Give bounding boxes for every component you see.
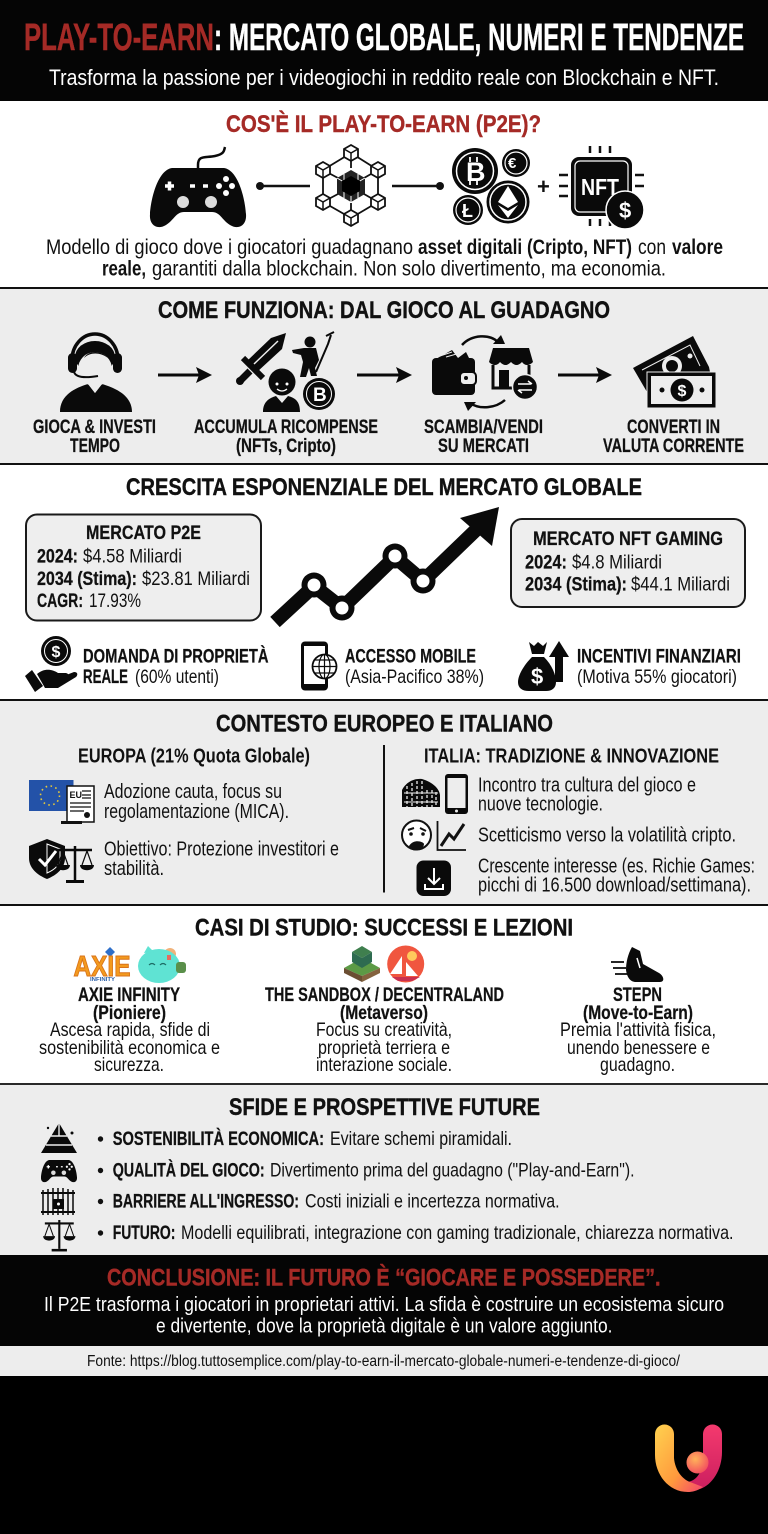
case: axie infinity: AXIE INFINITY [78,985,180,1006]
challenge: qualità [98,1160,635,1182]
conclusion text: e divertente, dove la proprietà digitale è un valore aggiunto. [156,1316,612,1338]
arrow [558,367,612,383]
challenge: barriere: BARRIERE ALL'INGRESSO: [113,1192,299,1212]
challenge: sostenibilità: SOSTENIBILITÀ ECONOMICA: [113,1128,324,1150]
case: stepn: guadagno. [600,1054,675,1076]
arrow [158,367,212,383]
icon: axie logo and mascot [74,946,186,983]
driver: incentivi finanziari: (Motiva 55% giocatori) [577,666,737,688]
heading: CRESCITA ESPONENZIALE DEL MERCATO GLOBALE [126,474,642,501]
plus sign: + [537,174,550,199]
title: PLAY-TO-EARN [24,17,214,59]
case: stepn [560,985,716,1076]
icon: NFT chip: NFT [581,174,619,200]
icon: rewards (sword, character, bitcoin): B [313,385,327,406]
challenge: barriere [98,1190,560,1212]
description: reale, [102,258,146,280]
case: axie infinity: Ascesa rapida, sfide di [50,1019,210,1041]
description: con [638,236,666,259]
stat box: mercato P2E: 2034 (Stima): [37,569,137,590]
step 3 label: SCAMBIA/VENDI [424,417,543,438]
icon: colosseum and phone [402,774,468,814]
stat box: mercato P2E: 2024: [37,546,78,568]
icon: money bag with up arrow: $ [531,664,543,689]
icon: coin over open hand: $ [52,644,60,661]
icon: thinking face and chart [402,820,466,850]
case: stepn: STEPN [613,985,662,1006]
case: axie infinity: sostenibilità economica e [39,1037,220,1059]
panel: cos'è il play-to-earn [0,101,768,287]
stat box: mercato P2E: CAGR: [37,591,83,612]
icon: pyramid [41,1123,77,1153]
case: axie infinity: (Pioniere) [93,1003,166,1024]
step 4 label: CONVERTI IN [627,417,720,438]
text: adozione cauta [104,781,289,823]
stat box: mercato NFT gaming: MERCATO NFT GAMING [533,529,723,550]
icon: blockchain network [316,145,385,226]
icon: crypto coins: € [508,155,517,172]
icon: logo [655,1424,722,1492]
step 1 label: GIOCA & INVESTI [33,417,156,438]
case: sandbox / decentraland: proprietà terriera e [318,1037,450,1059]
icon: NFT chip: $ [619,198,631,223]
description: garantiti dalla blockchain. Non solo divertimento, ma economia. [152,258,666,280]
stat box: mercato P2E: $23.81 Miliardi [142,568,250,590]
description [46,236,723,280]
icon: game controller [150,147,246,227]
text: crescente interesse [478,856,755,896]
chart: growth arrow [275,507,499,622]
icon: running shoe [611,947,663,982]
description: Modello di gioco dove i giocatori guadagnano [46,236,413,259]
icon: gate with padlock [41,1188,75,1215]
stat box: mercato NFT gaming: 2034 (Stima): [525,574,627,596]
icon: crypto coins [452,148,530,225]
icon: banknotes: $ [678,383,686,400]
icon: crypto coins: Ł [462,201,473,221]
icon: axie logo and mascot: AXIE [74,951,130,983]
source strip [0,1346,768,1376]
arrow [357,367,412,383]
step 1 label: TEMPO [70,436,120,457]
icon: crypto coins: B [466,157,486,187]
challenge: qualità: QUALITÀ DEL GIOCO: [113,1160,265,1182]
icon: EU flag and document [29,780,94,824]
case: sandbox / decentraland: Focus su creatività, [316,1019,452,1041]
stat box: mercato NFT gaming [511,519,745,607]
driver: domanda di proprietà: (60% utenti) [135,666,219,688]
icon: coin over open hand [25,636,77,692]
text: obiettivo: stabilità. [104,858,164,880]
icon: rewards (sword, character, bitcoin) [236,332,335,412]
driver: incentivi finanziari [577,646,741,688]
icon: shield and scales [29,839,94,883]
driver: accesso mobile [345,646,484,688]
description: asset digitali (Cripto, NFT) [418,236,632,259]
header banner [0,0,768,101]
subheading: europa: EUROPA (21% Quota Globale) [78,744,310,768]
driver: domanda di proprietà: DOMANDA DI PROPRIETÀ [83,646,269,668]
icon: scales [43,1220,75,1251]
text: incontro [478,774,696,816]
driver: accesso mobile: ACCESSO MOBILE [345,646,476,668]
text: adozione cauta: regolamentazione (MICA). [104,801,289,823]
text: incontro: Incontro tra cultura del gioco e [478,774,696,796]
step 3 label: SU MERCATI [438,436,529,457]
case: stepn: (Move-to-Earn) [583,1003,693,1024]
icon: money bag with up arrow [518,641,569,691]
challenge: futuro: FUTURO: [113,1223,175,1244]
text: obiettivo: Obiettivo: Protezione investitori e [104,838,339,860]
icon: axie logo and mascot: INFINITY [90,977,116,983]
heading: SFIDE E PROSPETTIVE FUTURE [229,1094,540,1121]
challenge: sostenibilità [98,1128,512,1150]
heading: COS'È IL PLAY-TO-EARN (P2E)? [226,110,541,138]
description: valore [672,236,723,259]
stat box: mercato P2E: 17.93% [89,590,141,612]
stat box: mercato NFT gaming: $44.1 Miliardi [631,574,730,596]
conclusion text [44,1294,724,1338]
case: axie infinity [39,985,220,1076]
icon: player with headset [60,334,132,412]
panel: conclusione [0,1255,768,1346]
icon: sandbox cube and decentraland [344,946,424,982]
panel: casi di studio [0,906,768,1083]
source strip: Fonte: https://blog.tuttosemplice.com/play-to-earn-il-mercato-globale-numeri-e-tendenze-di-gioco/ [87,1353,681,1370]
heading: CASI DI STUDIO: SUCCESSI E LEZIONI [195,914,573,942]
text: obiettivo [104,838,339,880]
step 3 label [424,417,543,457]
panel: come funziona [0,289,768,463]
stat box: mercato P2E: MERCATO P2E [86,523,201,544]
driver: domanda di proprietà [83,646,269,688]
connector: controller to blockchain [256,182,310,190]
case: sandbox / decentraland: THE SANDBOX / DECENTRALAND [265,985,504,1006]
icon: wallet and marketplace exchange [432,335,538,411]
step 2 label [194,417,378,457]
text: adozione cauta: Adozione cauta, focus su [104,781,282,803]
icon: EU flag and document: EU [70,790,82,800]
case: sandbox / decentraland: interazione sociale. [316,1054,452,1076]
icon: phone and globe [301,642,336,690]
panel: contesto europeo e italiano [0,701,768,904]
case: stepn: unendo benessere e [567,1037,710,1059]
icon: download [416,860,451,896]
heading: COME FUNZIONA: DAL GIOCO AL GUADAGNO [158,297,610,324]
driver: domanda di proprietà: REALE [83,667,128,688]
case: stepn: Premia l'attività fisica, [560,1019,716,1041]
icon: small gamepad [41,1160,77,1182]
text: incontro: nuove tecnologie. [478,794,603,816]
stat box: mercato NFT gaming: 2024: [525,552,567,574]
icon: banknotes [633,336,716,408]
panel: sfide e prospettive future [0,1085,768,1255]
driver: accesso mobile: (Asia-Pacifico 38%) [345,666,484,688]
step 2 label: ACCUMULA RICOMPENSE [194,417,378,438]
step 2 label: (NFTs, Cripto) [236,436,336,457]
stat box: mercato P2E [26,514,261,620]
stat box: mercato NFT gaming: $4.8 Miliardi [572,552,662,574]
step 4 label [603,417,744,457]
challenge: sostenibilità: Evitare schemi piramidali. [330,1128,512,1150]
icon: NFT chip [559,146,644,229]
case: sandbox / decentraland: (Metaverso) [340,1003,428,1024]
case: sandbox / decentraland [265,985,504,1076]
connector: blockchain to coins [392,182,444,190]
heading: CONTESTO EUROPEO E ITALIANO [216,710,553,738]
challenge: barriere: Costi iniziali e incertezza normativa. [305,1190,560,1212]
case: axie infinity: sicurezza. [94,1054,164,1076]
stat box: mercato P2E: $4.58 Miliardi [83,546,182,568]
panel: crescita del mercato [0,465,768,699]
step 1 label [33,417,156,457]
challenge: qualità: Divertimento prima del guadagno ("Play-and-Earn"). [270,1160,634,1182]
